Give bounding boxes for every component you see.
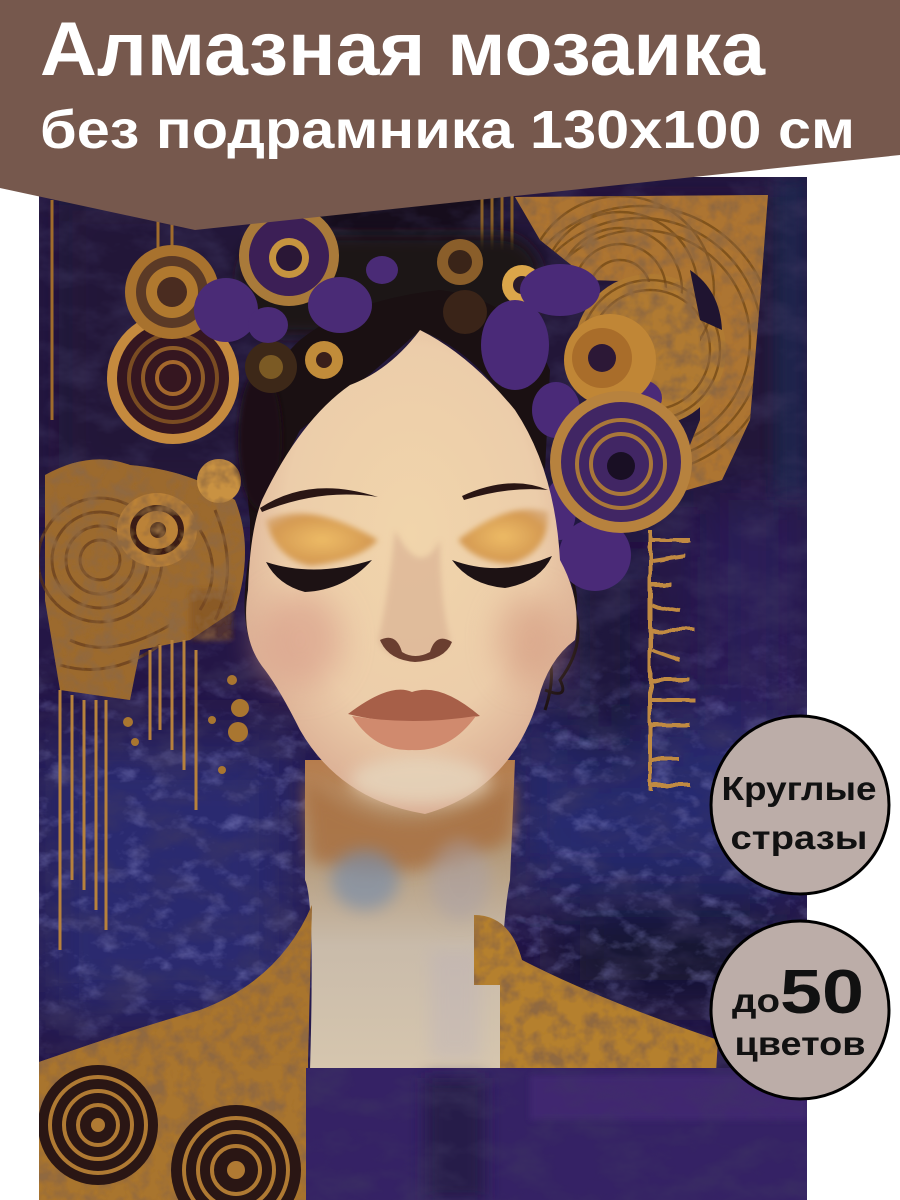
badge: up to 50 colours: 50	[780, 958, 864, 1027]
subtitle: без подрамника 130х100 см	[40, 100, 855, 160]
gold column top centre	[482, 195, 512, 250]
header banner	[0, 0, 900, 230]
badge: round rhinestones: Круглые	[722, 770, 876, 807]
purple flowers right	[481, 264, 662, 591]
badge: round rhinestones: стразы	[730, 819, 868, 856]
gold drips left	[52, 200, 196, 950]
coil ornaments left top	[107, 206, 542, 444]
gold shoulders	[39, 905, 718, 1200]
badge: up to 50 colours	[711, 921, 889, 1099]
hair	[238, 235, 578, 710]
painting background	[39, 177, 807, 1068]
gold swirl mass left	[38, 459, 245, 700]
badge: up to 50 colours: цветов	[734, 1025, 866, 1062]
hair curls	[244, 560, 580, 710]
gold dots left	[123, 675, 249, 774]
gold ornament right	[650, 530, 695, 790]
brows	[260, 488, 378, 512]
purple flowers left	[194, 256, 398, 343]
panel: painting	[38, 177, 807, 1200]
lips	[348, 690, 480, 722]
lashes	[266, 560, 372, 592]
gold striped panel upper right	[506, 195, 774, 495]
title: Алмазная мозаика	[40, 7, 766, 92]
badge: up to 50 colours: до	[732, 982, 780, 1019]
nose	[378, 530, 450, 658]
dark notch in gold panel	[690, 270, 722, 330]
badge: round rhinestones	[711, 716, 889, 894]
neck	[305, 760, 515, 1070]
gold coils on shoulder	[38, 1065, 301, 1200]
face	[246, 330, 577, 814]
eyelids	[266, 513, 378, 566]
coil ornaments right	[550, 314, 692, 533]
purple base block	[306, 1068, 807, 1200]
